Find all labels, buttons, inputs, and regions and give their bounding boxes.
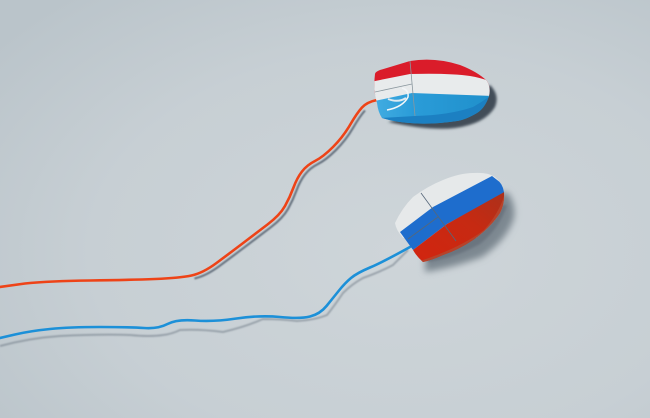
- blue wire: [0, 247, 410, 338]
- mouse 2 red band: [413, 192, 504, 262]
- mouse 1: red, white and blue: [374, 60, 490, 124]
- mouse 1 dark lip: [382, 97, 488, 124]
- red wire: [0, 100, 377, 287]
- mouse 1 button seams: [375, 61, 415, 116]
- blue wire shadow: [0, 250, 408, 346]
- mouse 2 white band: [395, 173, 504, 238]
- mouse 2: white, blue and red: [395, 173, 504, 262]
- mouse 1 highlight: [387, 88, 408, 110]
- mouse 1 blue band: [376, 93, 489, 124]
- mouse 2 lower lip: [422, 197, 504, 262]
- red wire shadow: [194, 110, 365, 278]
- mouse 2 shadow: [425, 192, 514, 272]
- mouse 1 shadow: [388, 85, 497, 129]
- mouse 2 button seams: [408, 193, 456, 241]
- mouse 2 blue band: [400, 176, 510, 250]
- mouse 1 white band: [370, 74, 495, 101]
- mouse 1 red band: [374, 60, 490, 95]
